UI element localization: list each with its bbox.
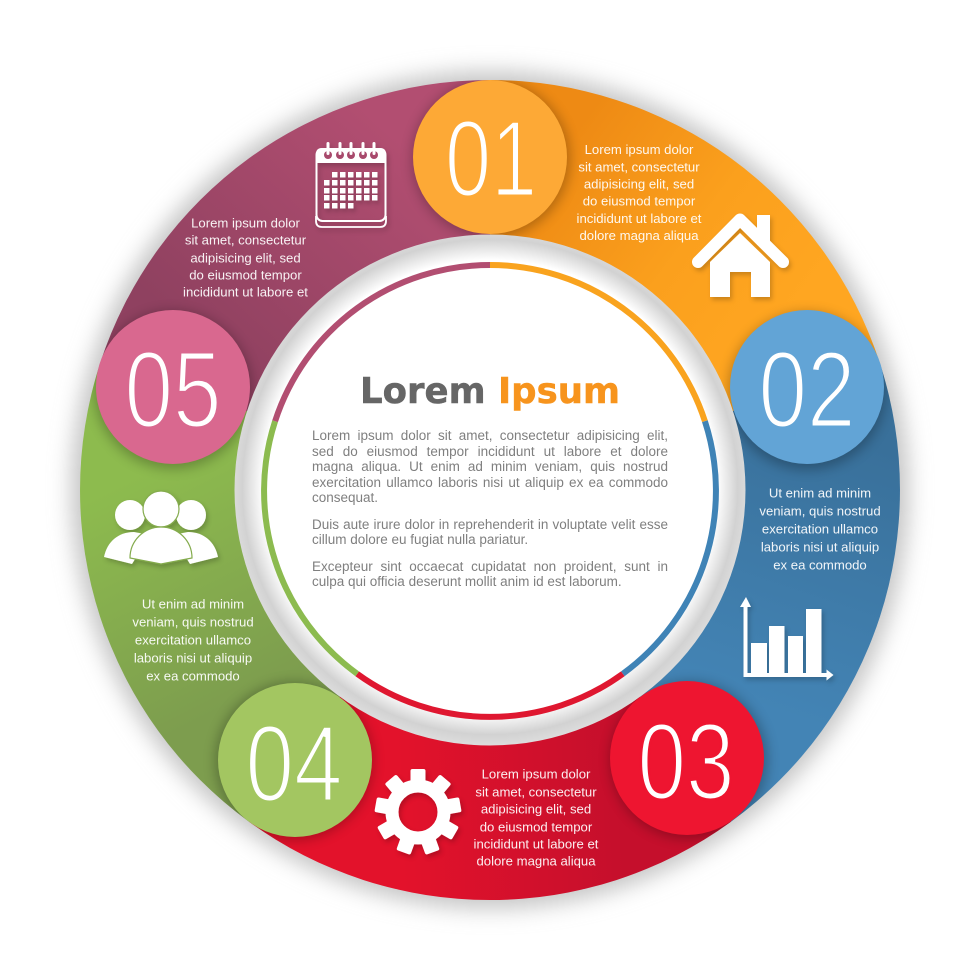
segment: maroon	[100, 80, 490, 490]
center body text: Duis aute irure dolor in reprehenderit in voluptate velit esse	[312, 517, 668, 532]
text block: segment 02: ex ea commodo	[773, 558, 867, 572]
text block: segment 05: do eiusmod tempor	[189, 268, 302, 282]
text block: segment 02: veniam, quis nostrud	[759, 504, 881, 518]
text block: segment 03: incididunt ut labore et	[474, 836, 599, 852]
center body text: exercitation ullamco laboris nisi ut aliquip ex ea commodo	[312, 475, 668, 490]
center body text: magna aliqua. Ut enim ad minim veniam, quis nostrud	[312, 459, 668, 474]
text block: segment 01: incididunt ut labore et	[577, 211, 702, 226]
text block: segment 03: Lorem ipsum dolor	[482, 766, 591, 782]
text block: segment 05: incididunt ut labore et	[183, 284, 308, 300]
icon: bar chart	[740, 597, 834, 680]
text block: segment 01: Lorem ipsum dolor	[585, 142, 694, 157]
segment: green	[80, 363, 490, 822]
text block: segment 02: exercitation ullamco	[762, 522, 878, 536]
text block: segment 03: adipisicing elit, sed	[481, 802, 591, 816]
center body text: sed do eiusmod tempor incididunt ut labore et dolore	[312, 444, 668, 459]
badge 01: 01	[445, 97, 537, 220]
text block: segment 01: adipisicing elit, sed	[584, 176, 694, 192]
badge 01	[413, 80, 567, 234]
text block: segment 01: do eiusmod tempor	[583, 194, 696, 208]
inner arc: green	[264, 421, 357, 674]
text block: segment 04: ex ea commodo	[146, 668, 240, 684]
badge 02: 02	[759, 329, 855, 450]
center body text: culpa qui officia deserunt mollit anim id est laborum.	[312, 574, 622, 589]
text block: segment 03: sit amet, consectetur	[475, 784, 597, 800]
text block: segment 03: do eiusmod tempor	[480, 820, 593, 834]
badge 04	[218, 683, 372, 837]
center body text: Excepteur sint occaecat cupidatat non proident, sunt in	[312, 559, 668, 574]
badge 02	[730, 310, 884, 464]
badge shadows	[94, 80, 886, 840]
badge 05: 05	[125, 329, 221, 450]
inner arc: orange	[490, 265, 705, 421]
text block: segment 04: Ut enim ad minim	[142, 596, 244, 612]
segment: red	[249, 490, 731, 900]
text block: segment 01: sit amet, consectetur	[578, 160, 700, 174]
center body text	[312, 428, 668, 589]
text block: segment 04: laboris nisi ut aliquip	[134, 650, 252, 666]
text block: segment 02: laboris nisi ut aliquip	[761, 540, 879, 554]
badge 03: 03	[638, 701, 734, 822]
badge 04: 04	[246, 703, 342, 824]
outer ring drop shadow	[71, 71, 909, 909]
inner arc: blue	[623, 421, 716, 674]
icon: house	[698, 215, 783, 297]
text block: segment 04: veniam, quis nostrud	[132, 614, 254, 630]
inner arc: maroon	[275, 265, 490, 421]
center body text: Lorem ipsum dolor sit amet, consectetur adipisicing elit,	[312, 428, 668, 443]
badge 03	[610, 681, 764, 835]
icon: gear	[374, 769, 462, 855]
text block: segment 04: exercitation ullamco	[135, 632, 251, 648]
text block: segment 05: Lorem ipsum dolor	[191, 216, 301, 230]
icon: calendar	[316, 142, 386, 227]
center body text: cillum dolore eu fugiat nulla pariatur.	[312, 532, 528, 547]
icon: people	[104, 491, 218, 564]
center body text: consequat.	[312, 490, 378, 505]
inner arc: red	[357, 674, 623, 717]
text block: segment 03: dolore magna aliqua	[476, 854, 596, 868]
text block: segment 02: Ut enim ad minim	[769, 486, 871, 500]
text block: segment 05: adipisicing elit, sed	[190, 250, 301, 266]
title: Lorem Ipsum	[360, 371, 620, 412]
segment: blue	[490, 363, 900, 822]
text block: segment 05: sit amet, consectetur	[185, 232, 307, 248]
center ring	[234, 234, 746, 746]
badge 05	[96, 310, 250, 464]
text block: segment 01: dolore magna aliqua	[579, 228, 699, 243]
segment: orange	[490, 80, 880, 490]
